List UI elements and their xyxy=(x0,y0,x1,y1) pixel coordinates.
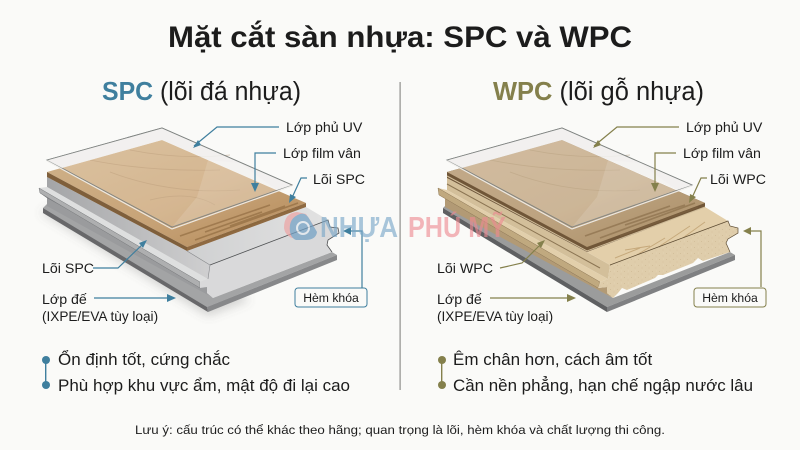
clear UV sheet xyxy=(47,128,292,227)
label box: Hèm khóa: Hèm khóa xyxy=(303,291,359,305)
labels: WPC: Lớp film vân xyxy=(683,146,761,162)
labels: WPC: Lõi WPC xyxy=(437,261,493,277)
base layer xyxy=(43,204,337,307)
panel: WPC xyxy=(437,77,766,395)
core top surface xyxy=(587,207,728,265)
labels: SPC: (IXPE/EVA tùy loại) xyxy=(42,309,158,324)
diagram: WPC plank cross-section xyxy=(438,128,738,312)
labels: SPC: Lõi SPC xyxy=(42,261,94,277)
base layer xyxy=(443,204,735,307)
upper side band of core xyxy=(47,177,210,279)
bullets: WPC: Cần nền phẳng, hạn chế ngập nước lâu xyxy=(453,376,753,395)
watermark text xyxy=(320,210,506,244)
labels: SPC: Lớp phủ UV xyxy=(286,120,363,136)
label box: Hèm khóa xyxy=(694,288,766,307)
labels: SPC xyxy=(42,120,365,324)
bullets: SPC xyxy=(42,350,350,395)
logo xyxy=(284,212,317,240)
labels: WPC: Lớp đế xyxy=(437,292,482,308)
wood film xyxy=(47,140,306,247)
upper side band of core xyxy=(447,178,610,279)
watermark text: PHÚ MỸ xyxy=(408,210,506,244)
labels: WPC: Lớp phủ UV xyxy=(686,120,763,136)
core end face with lock groove xyxy=(200,220,339,298)
watermark xyxy=(284,210,506,244)
watermark text: NHỰA xyxy=(320,212,398,244)
label box: Hèm khóa: Hèm khóa xyxy=(702,291,758,305)
heading: WPC: WPC (lõi gỗ nhựa) xyxy=(493,77,704,106)
diagram: SPC plank cross-section xyxy=(39,128,339,316)
panel: SPC xyxy=(39,78,367,395)
callouts: SPC xyxy=(93,127,362,298)
core tongue lip xyxy=(438,188,608,282)
labels: WPC xyxy=(437,120,766,324)
title: Mặt cắt sàn nhựa: SPC và WPC xyxy=(168,20,632,54)
divider between panels xyxy=(400,82,401,390)
clear UV sheet xyxy=(447,128,692,227)
lower side of core xyxy=(439,195,613,298)
bullets: SPC: Phù hợp khu vực ẩm, mật độ đi lại cao xyxy=(58,376,350,395)
callouts: WPC xyxy=(490,127,761,298)
footnote: Lưu ý: cấu trúc có thể khác theo hãng; quan trọng là lõi, hèm khóa và chất lượng thi công. xyxy=(135,423,665,437)
labels: SPC: Lớp đế xyxy=(42,292,87,308)
label box: Hèm khóa xyxy=(295,288,367,307)
core end face with lock groove xyxy=(598,221,738,298)
upper layer and wood film xyxy=(447,140,705,252)
bullets: WPC: Êm chân hơn, cách âm tốt xyxy=(453,350,652,369)
bullets: WPC xyxy=(438,350,753,395)
labels: SPC: Lớp film vân xyxy=(283,146,361,162)
labels: WPC: (IXPE/EVA tùy loại) xyxy=(437,309,553,324)
core tongue lip xyxy=(39,187,208,282)
labels: SPC: Lõi SPC xyxy=(313,172,365,188)
heading: SPC: SPC (lõi đá nhựa) xyxy=(102,78,301,106)
lower side of core xyxy=(40,193,213,298)
bullets: SPC: Ổn định tốt, cứng chắc xyxy=(58,350,231,369)
labels: WPC: Lõi WPC xyxy=(710,172,766,188)
core top surface xyxy=(187,207,328,265)
